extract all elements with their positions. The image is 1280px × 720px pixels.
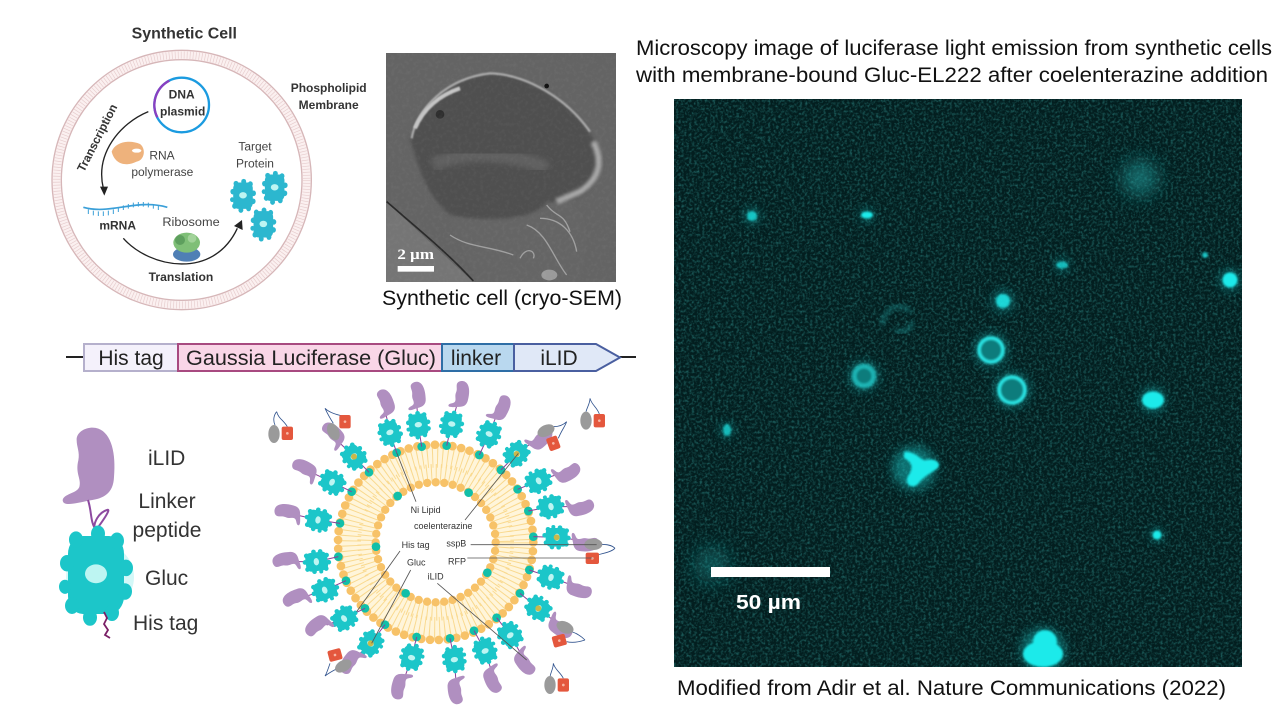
- faint diffuse cells: [694, 160, 1158, 583]
- segment: linker: [442, 344, 514, 371]
- segment: Gaussia Luciferase: Gaussia Luciferase (Gluc): [186, 347, 436, 370]
- scale bar: 50 µm: [711, 567, 830, 614]
- icons: target proteins: [230, 171, 288, 242]
- panel: vesicle membrane diagram: [268, 379, 615, 705]
- label: RNA polymerase: RNA: [149, 148, 175, 162]
- icon: iLID domain: [63, 428, 114, 504]
- vesicle labels: Ni Lipid: [411, 505, 441, 515]
- label: Linker peptide: Linker: [138, 490, 196, 513]
- panel: protein construct legend: [59, 428, 201, 638]
- label: Linker peptide: peptide: [133, 519, 201, 542]
- faint ring cell: [882, 306, 913, 331]
- scale bar: 2 µm: 2 µm: [397, 247, 434, 263]
- label: Linker peptide: [133, 490, 201, 542]
- linker peptides: [295, 403, 578, 682]
- glow halos: [721, 209, 1240, 672]
- coelenterazine in bound Gluc: [351, 451, 560, 646]
- title: microscopy image: Microscopy image of luciferase light emission from synthetic cells: [636, 37, 1272, 60]
- DNA plasmid: DNA: [169, 87, 195, 101]
- vesicle labels: His tag: [402, 540, 430, 550]
- panel: cryo-SEM micrograph: [386, 53, 616, 282]
- Gluc proteins: [301, 409, 571, 675]
- label: Target Protein: Target: [238, 140, 272, 154]
- icon: ribosome: [173, 233, 200, 262]
- DNA plasmid: plasmid: [160, 104, 205, 118]
- panel: synthetic cell diagram: [52, 26, 367, 310]
- vesicle labels: coelenterazine: [414, 521, 472, 531]
- label: Ribosome: Ribosome: [162, 215, 220, 229]
- DNA plasmid: [154, 78, 209, 132]
- label: His tag: His tag: [133, 612, 198, 635]
- icon: Gluc protein: [59, 525, 134, 626]
- heading: Synthetic Cell: Synthetic Cell: [132, 26, 237, 43]
- Ni lipid heads: [334, 441, 538, 643]
- caption: Synthetic cell (cryo-SEM): Synthetic cell (cryo-SEM): [382, 287, 622, 310]
- arrow: translation: [123, 220, 243, 264]
- label: Target Protein: Protein: [236, 156, 274, 170]
- lipid heads: [338, 445, 533, 640]
- label: Phospholipid Membrane: Membrane: [299, 98, 359, 112]
- ring-shaped cells: [854, 338, 1025, 403]
- label: iLID: iLID: [148, 447, 185, 470]
- segment: His tag: His tag: [98, 347, 164, 370]
- icon: mRNA strand: [83, 202, 167, 216]
- label: Phospholipid Membrane: Phospholipid: [291, 81, 367, 95]
- icon: linker peptide: [87, 500, 108, 546]
- vesicle labels: RFP: [448, 556, 466, 566]
- vesicle labels: Gluc: [407, 557, 426, 567]
- panel: fluorescence microscopy image: [674, 99, 1242, 672]
- label: Phospholipid Membrane: [291, 81, 367, 112]
- caption: source credit: Modified from Adir et al. Nature Communications (2022): [677, 677, 1226, 700]
- title: microscopy image: [635, 37, 1272, 87]
- label: Translation: Translation: [149, 270, 213, 284]
- label: RNA polymerase: [131, 148, 194, 179]
- segment: iLID arrow: [514, 344, 620, 371]
- icon: His tag: [104, 612, 110, 638]
- segment: His tag: [84, 344, 178, 371]
- gene construct bar: [66, 344, 636, 371]
- background noise: [674, 99, 1242, 667]
- title: microscopy image: with membrane-bound Gluc-EL222 after coelenterazine addition: [635, 64, 1268, 87]
- iLID domains: [272, 379, 599, 705]
- icon: RNA polymerase: [112, 142, 144, 164]
- label: Target Protein: [236, 140, 274, 170]
- label: Gluc: Gluc: [145, 567, 188, 590]
- segment: linker: linker: [451, 347, 501, 370]
- label: Transcription: Transcription: [74, 102, 120, 174]
- segment: iLID arrow: iLID: [540, 347, 578, 370]
- arrow: transcription: [100, 112, 148, 196]
- leader lines: [357, 453, 597, 660]
- label: mRNA: mRNA: [99, 218, 136, 232]
- scale bar: 2 µm: [397, 247, 434, 272]
- label: RNA polymerase: polymerase: [131, 165, 194, 179]
- bright spots: [723, 211, 1238, 667]
- sspB-RFP complexes: [268, 398, 615, 694]
- phospholipid membrane ring: [52, 50, 311, 310]
- SEM image: [386, 53, 616, 282]
- lipid tails: [350, 457, 521, 628]
- scale bar: 50 µm: 50 µm: [736, 592, 801, 614]
- vesicle labels: iLID: [428, 571, 444, 581]
- vesicle labels: [402, 505, 472, 581]
- vesicle labels: sspB: [446, 539, 466, 549]
